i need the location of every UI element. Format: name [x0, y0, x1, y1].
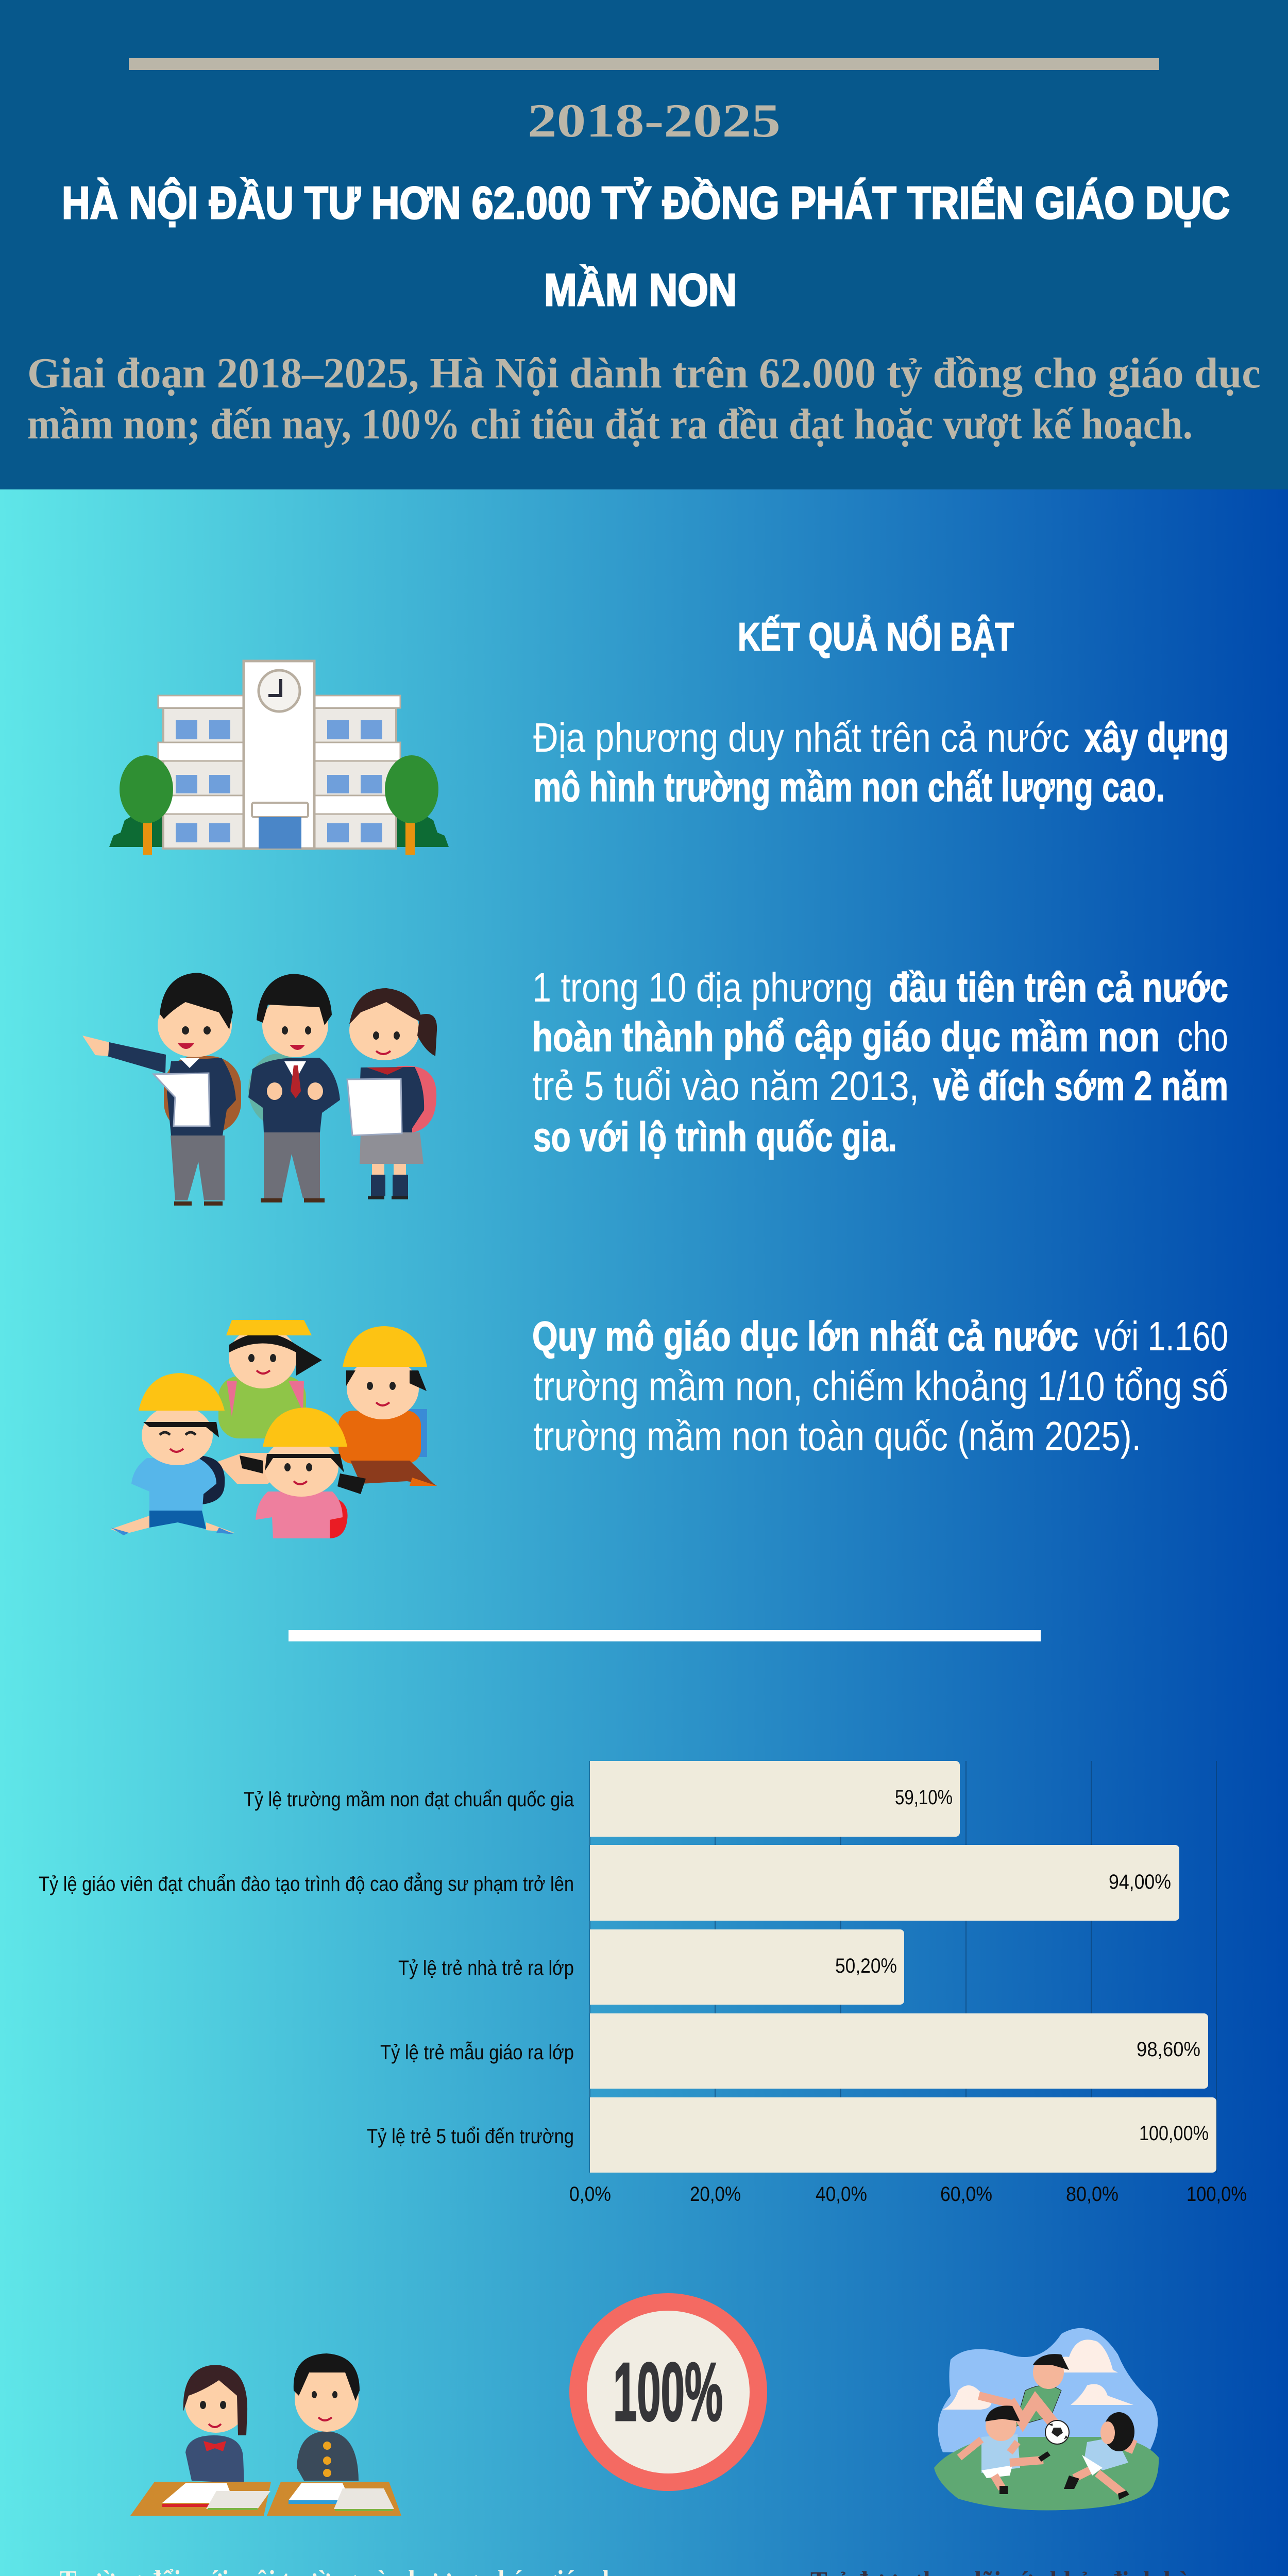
bar: kindergarten attendance [590, 2013, 1208, 2089]
text: highlight 2 [532, 964, 1228, 1160]
value labels: 50,20% [835, 1955, 897, 1977]
text: highlight 2: trẻ 5 tuổi vào năm 2013, [532, 1063, 919, 1109]
bar: five-year-olds at school [590, 2097, 1216, 2173]
category labels: Tỷ lệ trường mầm non đạt chuẩn quốc gia [244, 1788, 574, 1811]
icon: students at desks [130, 2353, 401, 2516]
text: highlight 2: cho [1177, 1014, 1228, 1060]
subtitle: Giai đoạn 2018–2025, Hà Nội dành trên 62.000 tỷ đồng cho giáo dục [27, 349, 1261, 397]
category labels: Tỷ lệ trẻ nhà trẻ ra lớp [398, 1957, 574, 1979]
title: MẦM NON [544, 264, 737, 315]
icon: school building [109, 661, 449, 855]
text: highlight 3 [532, 1313, 1228, 1459]
divider [289, 1630, 1041, 1641]
bar: nursery attendance [590, 1929, 904, 2005]
bar: national standard schools [590, 1761, 960, 1837]
category labels: Tỷ lệ giáo viên đạt chuẩn đào tạo trình độ cao đẳng sư phạm trở lên [39, 1872, 574, 1895]
value labels: 94,00% [1109, 1871, 1171, 1893]
icon: children playing soccer [934, 2328, 1159, 2510]
text: highlight 3: Quy mô giáo dục lớn nhất cả nước [532, 1313, 1078, 1359]
icon: 100% circle [569, 2293, 767, 2491]
axis labels: 80,0% [1066, 2183, 1118, 2206]
axis labels [569, 2183, 1247, 2206]
axis labels: 60,0% [940, 2183, 992, 2206]
text: highlight 3: trường mầm non toàn quốc (năm 2025). [533, 1413, 1141, 1459]
period label: 2018-2025 [528, 94, 781, 147]
axis labels: 40,0% [816, 2183, 867, 2206]
value labels: 59,10% [895, 1786, 953, 1809]
bar: qualified teachers [590, 1845, 1179, 1921]
axis labels: 0,0% [569, 2183, 611, 2206]
icon: children with yellow helmets [111, 1320, 437, 1538]
subtitle [27, 349, 1261, 448]
label: 100%: 100% [613, 2346, 723, 2438]
subtitle: mầm non; đến nay, 100% chỉ tiêu đặt ra đều đạt hoặc vượt kế hoạch. [27, 400, 1193, 448]
category labels [39, 1788, 574, 2148]
text: highlight 1 [533, 715, 1229, 810]
category labels: Tỷ lệ trẻ 5 tuổi đến trường [367, 2125, 574, 2148]
value labels [835, 1786, 1209, 2145]
axis labels: 20,0% [690, 2183, 741, 2206]
icon: three students [82, 973, 437, 1206]
header rule [129, 58, 1159, 70]
text: highlight 1: Địa phương duy nhất trên cả nước [533, 715, 1070, 760]
bar chart [39, 1761, 1247, 2206]
text: highlight 3: với 1.160 [1094, 1313, 1228, 1359]
panel: header [0, 0, 1288, 489]
value labels: 98,60% [1137, 2038, 1200, 2061]
axis labels: 100,0% [1187, 2183, 1247, 2206]
text: highlight 2: so với lộ trình quốc gia. [533, 1114, 897, 1160]
category labels: Tỷ lệ trẻ mẫu giáo ra lớp [380, 2041, 574, 2064]
text: highlight 2: 1 trong 10 địa phương [532, 964, 873, 1010]
text: highlight 2: hoàn thành phổ cập giáo dục mầm non [532, 1014, 1160, 1060]
value labels: 100,00% [1139, 2122, 1209, 2145]
title [62, 177, 1230, 315]
heading: key results: KẾT QUẢ NỔI BẬT [738, 615, 1014, 659]
text: highlight 1: xây dựng [1084, 715, 1229, 760]
